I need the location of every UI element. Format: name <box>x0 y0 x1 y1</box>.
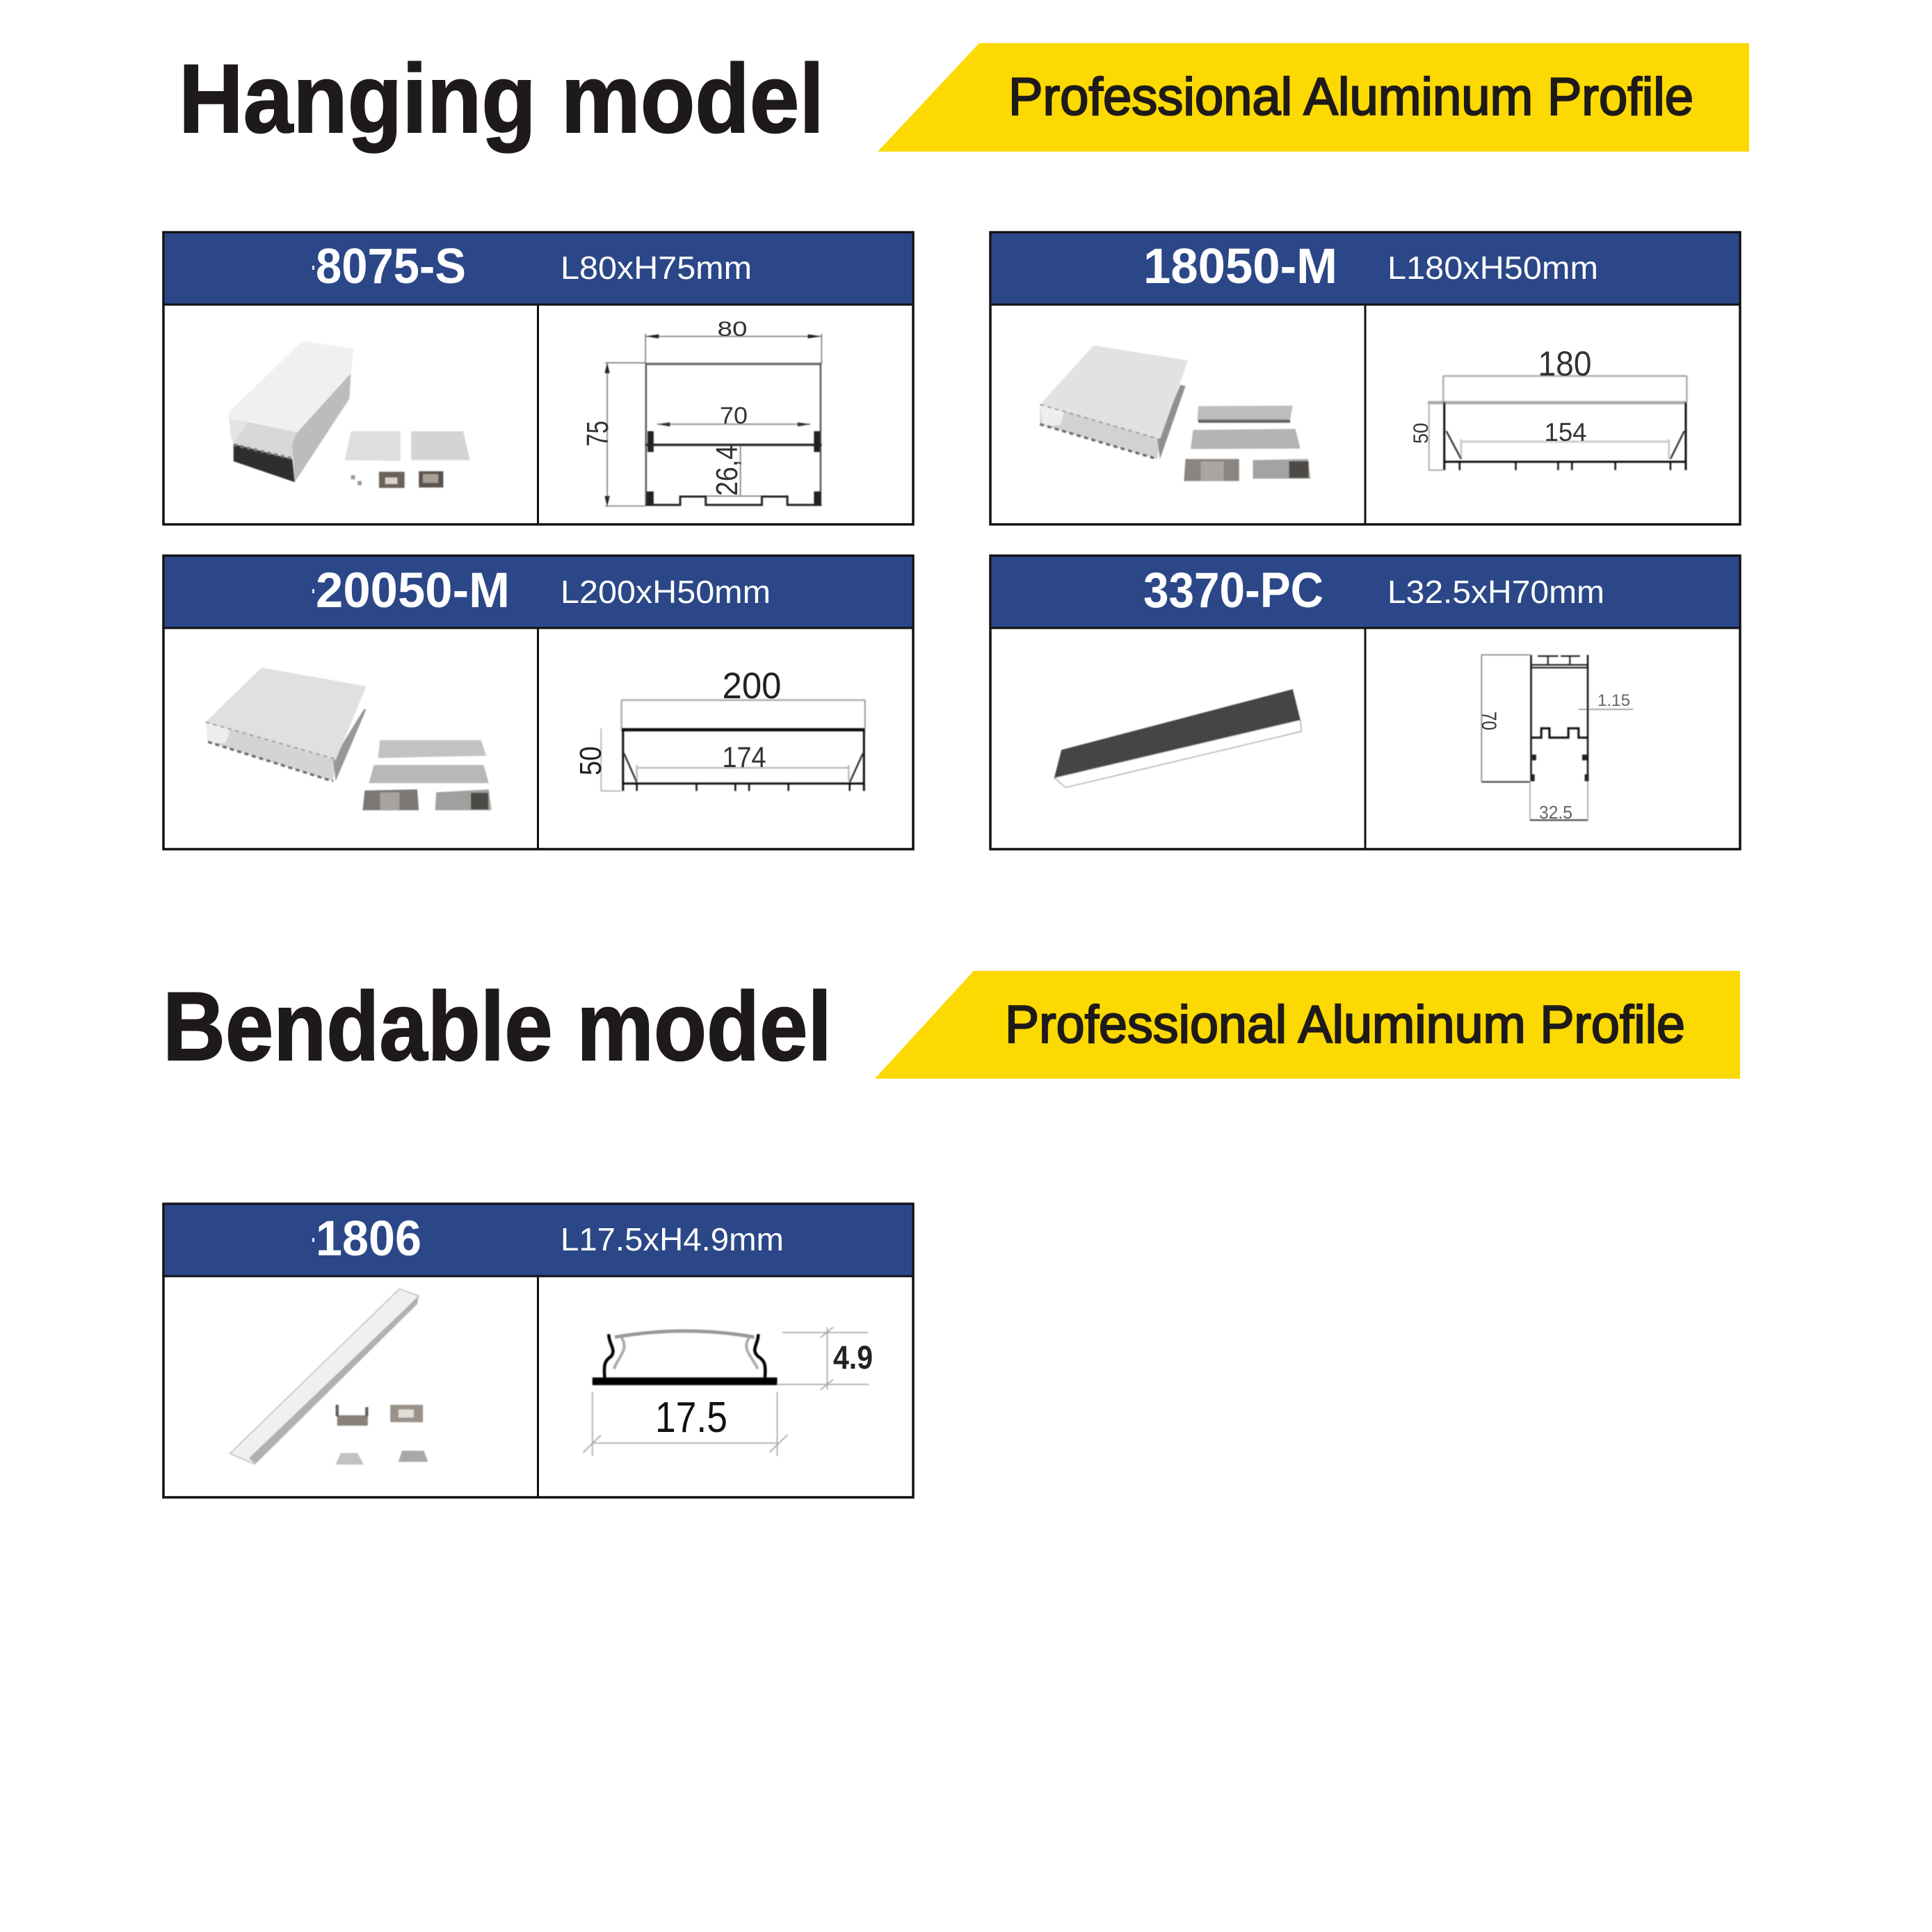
drawing: 8075-S cross section: 70 <box>720 403 748 429</box>
banner: Professional Aluminum Profile (bendable): Professional Aluminum Profile <box>1005 995 1685 1054</box>
heading: Hanging model: Hanging model <box>179 44 824 153</box>
drawing: 18050-M cross section <box>1410 344 1687 470</box>
drawing: 3370-PC cross section <box>1477 655 1633 823</box>
drawing: 1806 cross section: 4.9 <box>833 1339 873 1376</box>
drawing: 18050-M cross section: 180 <box>1538 344 1591 383</box>
banner: Professional Aluminum Profile (bendable) <box>875 971 1740 1079</box>
panel: 18050-M: 18050-M <box>1143 239 1337 294</box>
product photo: 3370-PC linear light <box>1054 689 1301 787</box>
panel: 1806 <box>163 1204 913 1497</box>
product photo: 20050-M <box>205 668 491 810</box>
banner: Professional Aluminum Profile (hanging) <box>878 43 1749 152</box>
product photo: 18050-M <box>1040 346 1310 481</box>
panel: 1806: 1806 <box>316 1211 421 1266</box>
panel: 20050-M: 20050-M <box>316 563 510 618</box>
panel: 3370-PC: 3370-PC <box>1143 563 1323 618</box>
drawing: 8075-S cross section: 75 <box>581 421 615 446</box>
panel: 8075-S: 8075-S <box>316 239 466 294</box>
product photo: 1806 strip and clips <box>230 1289 428 1465</box>
panel: 3370-PC: L32.5xH70mm <box>1387 574 1604 610</box>
drawing: 8075-S cross section: 26,4 <box>710 445 744 496</box>
heading: Bendable model: Bendable model <box>163 972 832 1081</box>
panel: 18050-M <box>990 232 1740 524</box>
panel: 3370-PC <box>990 556 1740 849</box>
product photo: 8075-S <box>228 341 470 488</box>
drawing: 8075-S cross section: 80 <box>718 318 747 341</box>
drawing: 1806 cross section <box>583 1327 873 1456</box>
banner: Professional Aluminum Profile (hanging): Professional Aluminum Profile <box>1008 67 1693 127</box>
drawing: 3370-PC cross section: 32.5 <box>1539 802 1572 823</box>
drawing: 20050-M cross section: 200 <box>722 666 782 707</box>
panel: 8075-S: L80xH75mm <box>561 250 752 286</box>
drawing: 18050-M cross section: 154 <box>1544 418 1587 446</box>
drawing: 20050-M cross section: 174 <box>722 741 766 773</box>
drawing: 20050-M cross section: 50 <box>574 746 608 775</box>
panel: 20050-M <box>163 556 913 849</box>
drawing: 3370-PC cross section: 1.15 <box>1597 691 1630 710</box>
panel: 20050-M: L200xH50mm <box>561 574 771 610</box>
drawing: 8075-S cross section <box>581 318 821 506</box>
drawing: 3370-PC cross section: 70 <box>1477 711 1500 730</box>
drawing: 20050-M cross section <box>574 666 865 791</box>
panel: 1806: L17.5xH4.9mm <box>561 1221 784 1257</box>
panel: 8075-S <box>163 232 913 524</box>
panel: 18050-M: L180xH50mm <box>1387 250 1598 286</box>
drawing: 1806 cross section: 17.5 <box>655 1394 727 1442</box>
drawing: 18050-M cross section: 50 <box>1410 423 1433 444</box>
